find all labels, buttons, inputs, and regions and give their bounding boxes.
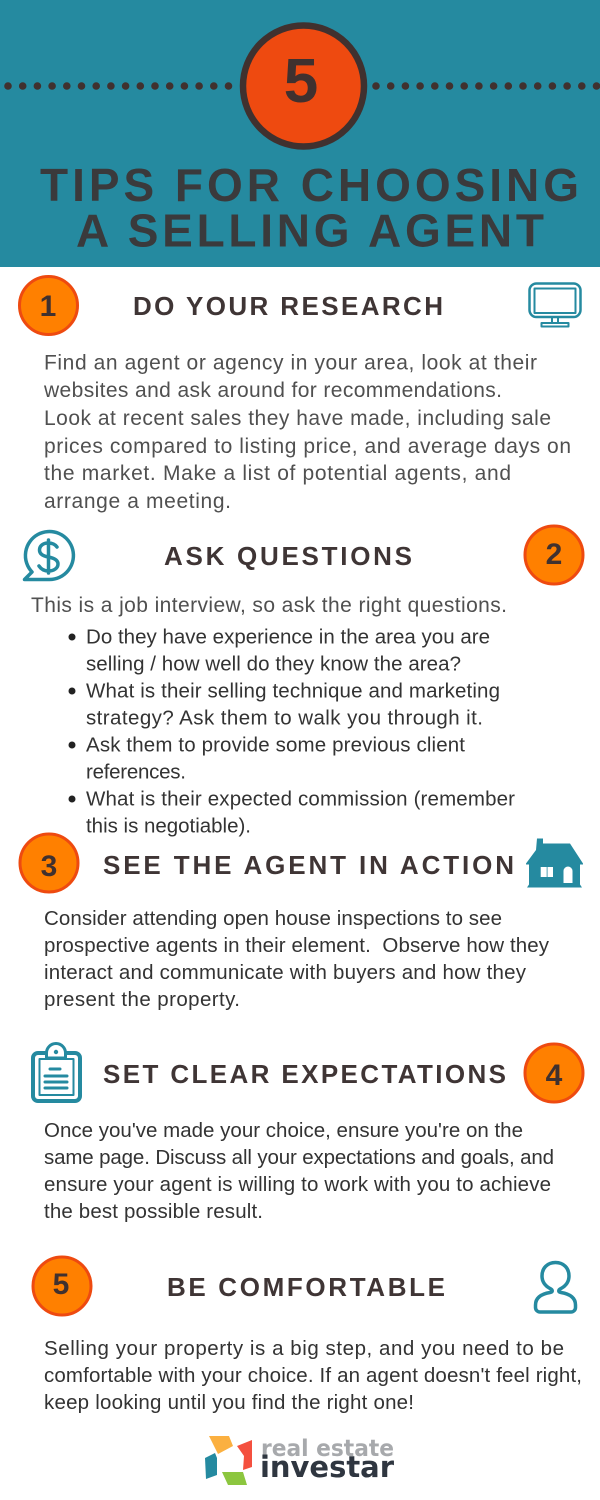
text block 1 — [43, 352, 571, 513]
text block 3: Consider attending open house inspections to see — [44, 907, 502, 930]
panel: tip 3 — [20, 834, 583, 1011]
heading 1: DO YOUR RESEARCH — [133, 291, 443, 321]
big number circle: 5 — [284, 47, 318, 116]
heading 4: SET CLEAR EXPECTATIONS — [103, 1059, 506, 1089]
text block 1: prices compared to listing price, and average days on — [44, 435, 571, 458]
logo mark — [205, 1436, 252, 1485]
bullet list: references. — [86, 760, 186, 784]
text block 5 — [44, 1337, 582, 1414]
panel: tip 5 — [33, 1257, 582, 1414]
heading 2: ASK QUESTIONS — [164, 541, 412, 571]
text block 4: Once you've made your choice, ensure you're on the — [44, 1119, 523, 1142]
badge 5: 5 — [53, 1268, 69, 1301]
heading 3: SEE THE AGENT IN ACTION — [103, 850, 514, 880]
text block 1: arrange a meeting. — [44, 490, 231, 513]
logo: real estate investar: investar — [260, 1450, 395, 1484]
dotted line left and right — [4, 82, 600, 90]
header banner — [0, 0, 600, 267]
text block 3: present the property. — [44, 988, 240, 1011]
text block 1: the market. Make a list of potential agents, and — [44, 462, 511, 485]
title: TIPS FOR CHOOSING — [40, 159, 579, 211]
logo: real estate investar — [205, 1436, 395, 1485]
bullet list: What is their expected commission (remember — [86, 788, 515, 810]
text block 4: same page. Discuss all your expectations and goals, and — [44, 1146, 554, 1169]
text block 5: Selling your property is a big step, and you need to be — [44, 1337, 564, 1360]
icon: monitor — [530, 284, 580, 326]
text block 4: ensure your agent is willing to work with you to achieve — [44, 1173, 551, 1196]
icon: person — [536, 1262, 576, 1312]
badge 1: 1 — [40, 290, 56, 323]
text block 1: websites and ask around for recommendations. — [43, 379, 502, 402]
intro text: This is a job interview, so ask the right questions. — [31, 594, 507, 617]
badge 4: 4 — [546, 1059, 563, 1092]
bullet list: selling / how well do they know the area? — [86, 652, 461, 676]
bullet list: Do they have experience in the area you are — [86, 626, 490, 648]
text block 4: the best possible result. — [44, 1200, 263, 1223]
badge 5 — [33, 1257, 91, 1315]
bullet list: What is their selling technique and marketing — [86, 680, 500, 702]
text block 5: comfortable with your choice. If an agent doesn't feel right, — [44, 1364, 582, 1387]
text block 5: keep looking until you find the right one! — [44, 1391, 414, 1414]
logo wordmark: real estate — [261, 1436, 394, 1462]
text block 1: Look at recent sales they have made, including sale — [44, 407, 551, 430]
badge 2 — [525, 526, 583, 584]
title: A SELLING AGENT — [76, 204, 544, 256]
bullet list: Ask them to provide some previous client — [86, 734, 465, 756]
bullet list: strategy? Ask them to walk you through it. — [86, 706, 483, 730]
panel: tip 4 — [33, 1044, 583, 1223]
title — [40, 159, 579, 256]
badge 1 — [20, 276, 78, 334]
big number circle — [243, 26, 364, 146]
text block 3: prospective agents in their element. Observe how they — [44, 934, 550, 957]
badge 4 — [525, 1044, 583, 1102]
text block 3: interact and communicate with buyers and how they — [44, 961, 527, 984]
panel: tip 1 — [20, 276, 580, 513]
bullet list: this is negotiable). — [86, 814, 251, 838]
badge 3: 3 — [41, 850, 57, 883]
icon: dollar speech bubble — [24, 532, 73, 580]
bullet list — [68, 626, 515, 838]
panel: tip 2 — [24, 526, 583, 838]
heading 5: BE COMFORTABLE — [167, 1272, 445, 1302]
text block 4 — [44, 1119, 554, 1223]
text block 1: Find an agent or agency in your area, look at their — [44, 352, 537, 374]
text block 3 — [44, 907, 550, 1011]
icon: house — [526, 838, 583, 888]
icon: clipboard — [33, 1044, 80, 1101]
badge 2: 2 — [546, 538, 562, 571]
badge 3 — [20, 834, 78, 892]
